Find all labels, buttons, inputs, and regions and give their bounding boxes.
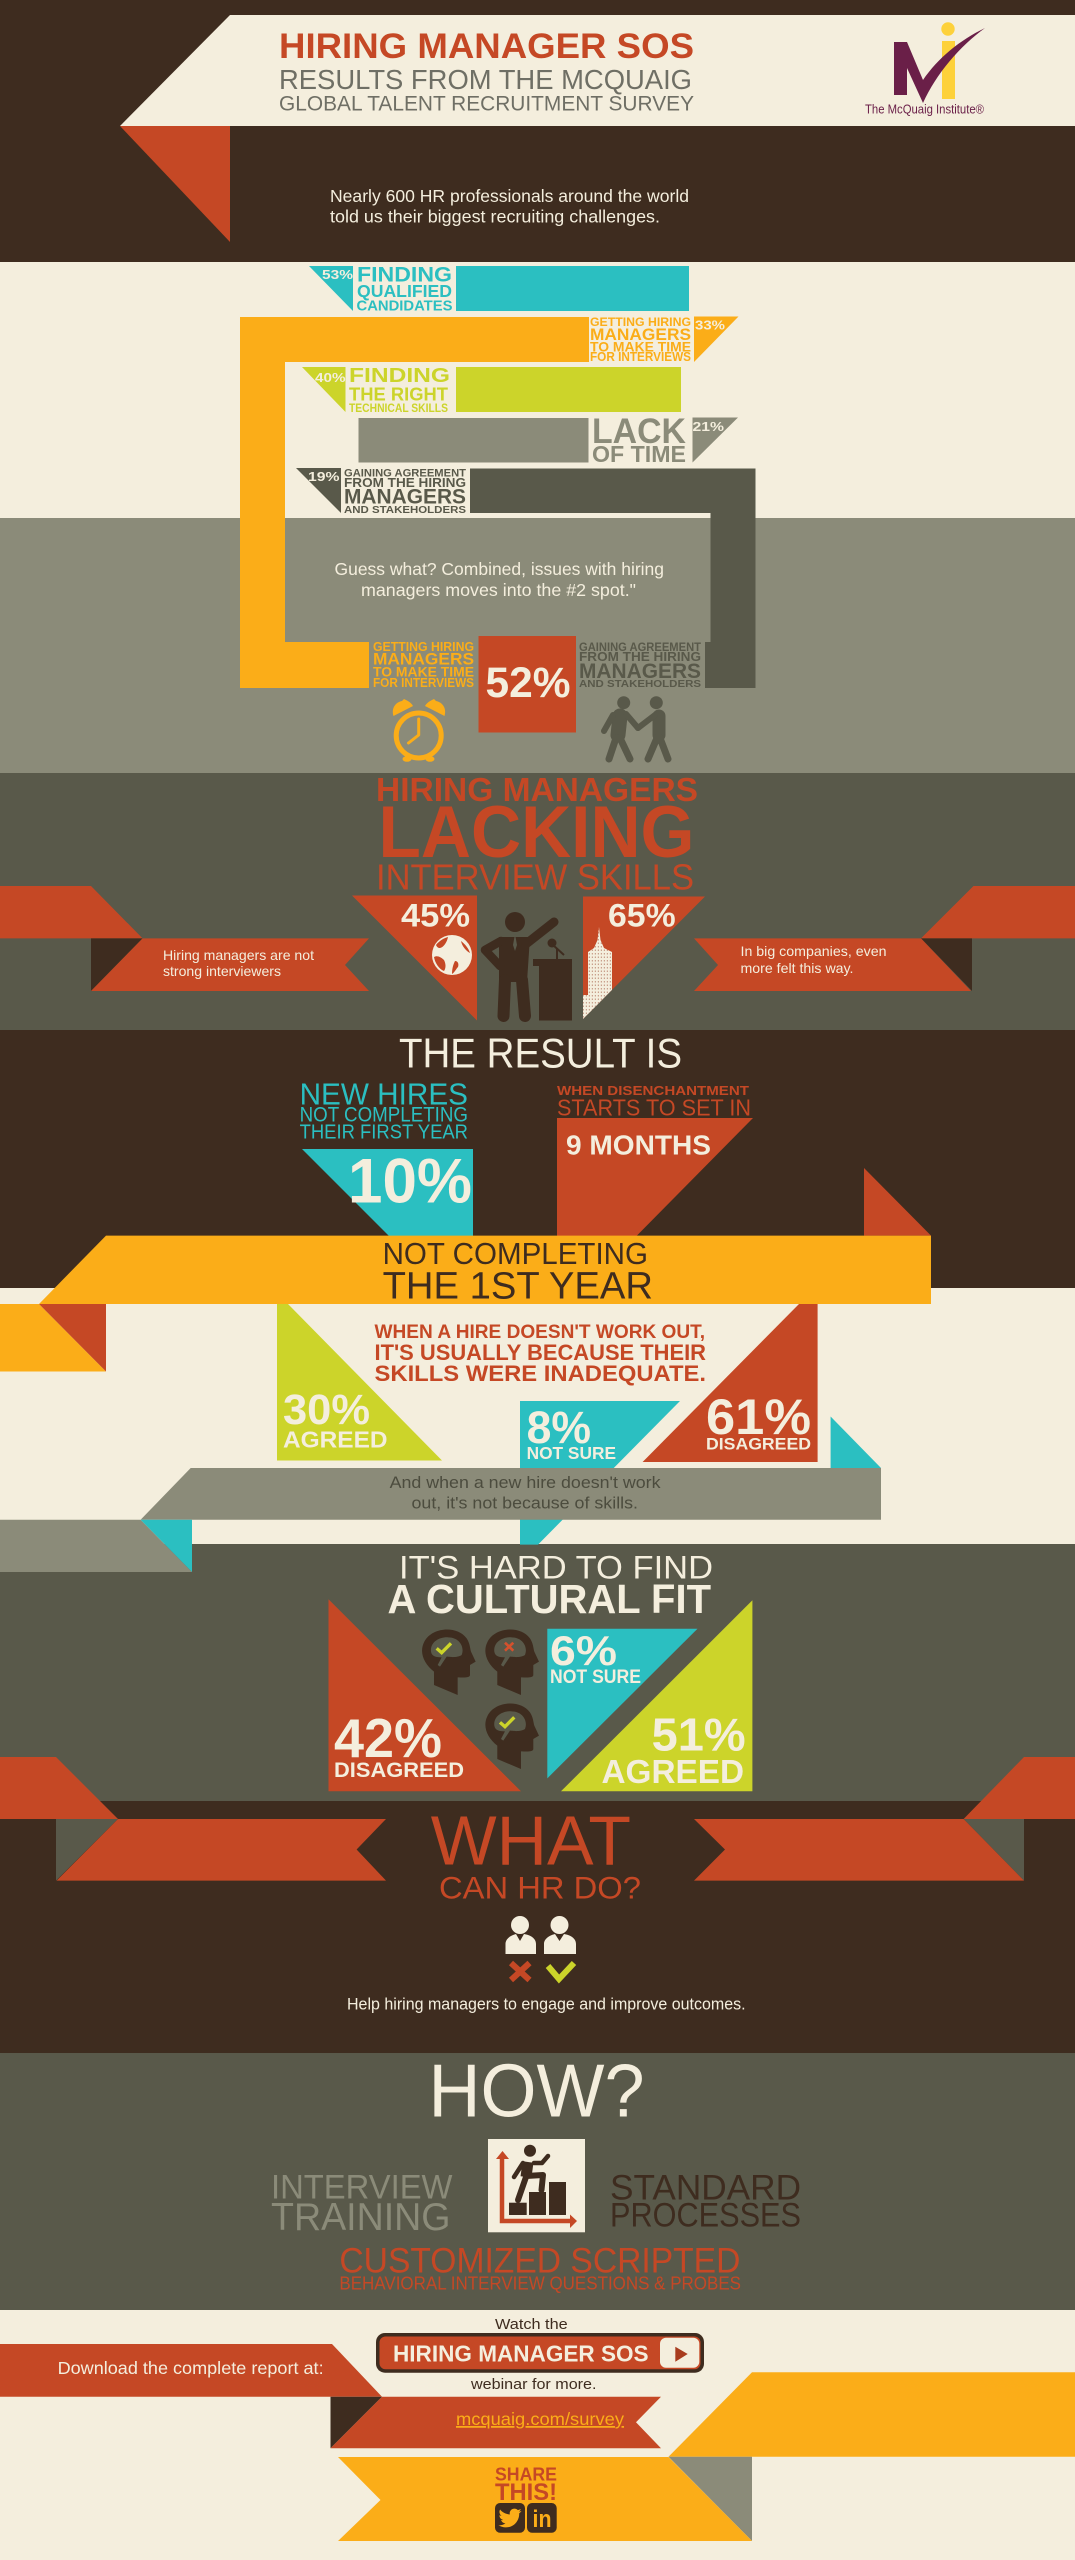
callout: guess what: managers moves into the #2 spot." <box>361 580 636 600</box>
ribbon: what left <box>0 1757 386 1881</box>
heading: hiring managers lacking interview skills: INTERVIEW SKILLS <box>376 856 694 897</box>
stat: 8% not sure: 8% <box>527 1402 591 1453</box>
subtitle line two: GLOBAL TALENT RECRUITMENT SURVEY <box>279 92 694 116</box>
ribbon: share this: SHARE <box>495 2465 557 2485</box>
label: getting hiring managers: FOR INTERVIEWS <box>373 676 474 690</box>
ribbon: right big companies: more felt this way. <box>740 960 854 976</box>
ribbon: not completing the 1st year <box>0 1168 931 1372</box>
text: when disenchantment: WHEN DISENCHANTMENT <box>557 1083 749 1098</box>
stat: 9 months: 9 MONTHS <box>566 1130 711 1160</box>
bar: gaining agreement 19%: 19% <box>308 469 340 484</box>
heading: how: HOW? <box>428 2049 644 2133</box>
stat: 42% disagreed <box>328 1599 521 1791</box>
bar: lack of time 21%: LACK <box>592 412 686 451</box>
label: getting hiring managers: TO MAKE TIME <box>373 663 474 679</box>
heading: when a hire doesn't work out: WHEN A HIRE DOESN'T WORK OUT, <box>374 1322 705 1343</box>
stat: 45% with globe: 45% <box>401 898 470 934</box>
stat: 61% disagreed: DISAGREED <box>706 1434 811 1454</box>
text: new hires not completing: NOT COMPLETING <box>300 1103 468 1126</box>
icon: head with check <box>422 1630 476 1695</box>
ribbon: not because of skills: And when a new hire doesn't work <box>390 1473 661 1492</box>
text: standard processes <box>610 2168 801 2235</box>
text: interview training: TRAINING <box>271 2196 450 2239</box>
button: hiring manager sos webinar: HIRING MANAGER SOS <box>393 2341 649 2367</box>
text: help hiring managers: Help hiring managers to engage and improve outcomes. <box>347 1995 746 2014</box>
stat: 45% with globe <box>352 896 477 1020</box>
logo: McQuaig Institute <box>865 22 985 117</box>
label: getting hiring managers: GETTING HIRING <box>373 640 474 654</box>
text: interview training: INTERVIEW <box>271 2168 452 2206</box>
text: customized scripted: BEHAVIORAL INTERVIEW QUESTIONS & PROBES <box>339 2272 741 2293</box>
icon: speaker at podium <box>485 912 572 1020</box>
stat: 8% not sure <box>520 1401 680 1545</box>
bar: lack of time 21%: 21% <box>692 419 725 434</box>
intro text <box>330 186 689 226</box>
heading: cultural fit: IT'S HARD TO FIND <box>399 1549 713 1585</box>
stat: 30% agreed <box>277 1304 442 1460</box>
icon: twitter <box>495 2503 525 2533</box>
bar: finding qualified candidates 53% <box>309 264 689 314</box>
bar: gaining agreement 19% <box>296 468 756 688</box>
heading: when a hire doesn't work out: SKILLS WERE INADEQUATE. <box>374 1361 706 1386</box>
ribbon: left strong interviewers: Hiring managers are not <box>163 947 314 963</box>
bar: finding the right technical skills 40%: 40% <box>315 370 346 385</box>
ribbon: left strong interviewers: strong interviewers <box>163 963 281 979</box>
text: when disenchantment <box>557 1083 751 1121</box>
icon: head with cross <box>485 1630 539 1695</box>
stat: 6% not sure: 6% <box>550 1627 617 1674</box>
stat: 10% <box>302 1146 473 1236</box>
ribbon: download report: Download the complete report at: <box>58 2358 324 2378</box>
ribbon: not because of skills: out, it's not because of skills. <box>412 1494 638 1512</box>
text: new hires not completing: NEW HIRES <box>300 1076 468 1112</box>
stat: 61% disagreed: 61% <box>706 1389 811 1445</box>
stat: 30% agreed: AGREED <box>283 1427 388 1453</box>
intro text: Nearly 600 HR professionals around the world <box>330 186 689 206</box>
stat: 52%: 52% <box>486 659 570 707</box>
bar: finding the right technical skills 40%: FINDING <box>349 364 450 387</box>
bar: getting hiring managers 33%: 33% <box>695 318 725 332</box>
bar: finding qualified candidates 53%: FINDING <box>357 264 452 286</box>
stat: 10%: 10% <box>348 1146 472 1216</box>
icon: handshake <box>604 696 668 759</box>
heading: hiring managers lacking interview skills <box>376 772 698 897</box>
ribbon: right big companies: In big companies, even <box>740 943 886 959</box>
stat: 51% agreed <box>561 1600 752 1791</box>
text: new hires not completing: THEIR FIRST YEAR <box>300 1121 468 1143</box>
callout: guess what: Guess what? Combined, issues with hiring <box>334 559 664 579</box>
stat: 51% agreed: AGREED <box>602 1753 744 1790</box>
stat: 9 months <box>557 1118 753 1236</box>
icon: linkedin <box>527 2503 557 2533</box>
text: webinar for more: webinar for more. <box>470 2376 596 2393</box>
bar: getting hiring managers 33%: TO MAKE TIME <box>590 338 691 354</box>
stat: 65% with building <box>583 896 705 1020</box>
bar: finding the right technical skills 40%: THE RIGHT <box>349 384 448 404</box>
stat: 51% agreed: 51% <box>652 1708 746 1760</box>
bar: gaining agreement 19%: FROM THE HIRING <box>344 475 466 490</box>
subtitle line one: RESULTS FROM THE MCQUAIG <box>279 64 692 95</box>
text: new hires not completing <box>300 1076 468 1143</box>
bar: gaining agreement 19%: AND STAKEHOLDERS <box>344 504 466 516</box>
bar: gaining agreement 19%: GAINING AGREEMENT <box>344 468 466 480</box>
text: watch the: Watch the <box>495 2316 568 2333</box>
stat: 61% disagreed <box>643 1304 818 1462</box>
heading: the result is: THE RESULT IS <box>399 1029 682 1076</box>
text: interview training <box>271 2168 452 2239</box>
ribbon: download report: mcquaig.com/survey <box>456 2409 624 2429</box>
label: getting hiring managers <box>373 640 474 690</box>
bar: lack of time 21% <box>358 412 738 467</box>
heading: what can hr do: WHAT <box>431 1802 631 1880</box>
text: standard processes: PROCESSES <box>610 2197 801 2235</box>
label: gaining agreement <box>579 640 702 690</box>
bar: getting hiring managers 33%: GETTING HIRING <box>590 315 691 329</box>
bar: finding the right technical skills 40% <box>302 364 681 415</box>
ribbon: share this: THIS! <box>495 2479 557 2506</box>
heading: cultural fit <box>388 1549 713 1622</box>
bar: getting hiring managers 33%: FOR INTERVIEWS <box>590 350 691 364</box>
ribbon: not completing the 1st year: THE 1ST YEAR <box>383 1265 653 1307</box>
bar: finding qualified candidates 53%: QUALIFIED <box>357 281 452 301</box>
icon: people with cross and check <box>506 1916 576 1980</box>
intro text: told us their biggest recruiting challenges. <box>330 206 660 226</box>
icon: linkedin: in <box>532 2506 552 2533</box>
ribbon: right big companies <box>694 886 1075 991</box>
logo: McQuaig Institute: The McQuaig Institute® <box>865 103 985 117</box>
label: gaining agreement: AND STAKEHOLDERS <box>579 678 701 690</box>
heading: when a hire doesn't work out: IT'S USUALLY BECAUSE THEIR <box>374 1340 706 1365</box>
text: standard processes: STANDARD <box>610 2168 801 2207</box>
heading: hiring managers lacking interview skills: LACKING <box>378 792 694 873</box>
label: getting hiring managers: MANAGERS <box>373 650 474 669</box>
label: gaining agreement: MANAGERS <box>579 660 701 683</box>
heading: what can hr do: CAN HR DO? <box>439 1869 641 1905</box>
bar: finding qualified candidates 53%: 53% <box>322 267 354 282</box>
button: hiring manager sos webinar <box>376 2333 704 2373</box>
ribbon: left strong interviewers <box>0 886 369 991</box>
ribbon: not completing the 1st year: NOT COMPLETING <box>383 1237 648 1271</box>
label: gaining agreement: FROM THE HIRING <box>579 650 701 664</box>
panel: header banner <box>120 15 1075 242</box>
stat: 52% <box>478 636 576 732</box>
text: when disenchantment: STARTS TO SET IN <box>557 1095 751 1121</box>
stat: 8% not sure: NOT SURE <box>527 1443 616 1463</box>
bar: gaining agreement 19%: MANAGERS <box>344 486 466 508</box>
stat: 6% not sure <box>547 1627 698 1778</box>
heading: when a hire doesn't work out <box>374 1322 706 1386</box>
bar: finding the right technical skills 40%: TECHNICAL SKILLS <box>349 403 448 415</box>
stat: 42% disagreed: DISAGREED <box>334 1759 464 1782</box>
bar: getting hiring managers 33% <box>240 315 738 688</box>
stat: 65% with building: 65% <box>608 898 676 934</box>
icon: head with check lower <box>485 1704 539 1769</box>
icon: climbing steps <box>488 2139 585 2232</box>
stat: 6% not sure: NOT SURE <box>550 1667 641 1688</box>
bar: finding qualified candidates 53%: CANDIDATES <box>356 298 452 314</box>
ribbon: share this <box>338 2372 1075 2541</box>
heading: cultural fit: A CULTURAL FIT <box>388 1576 711 1622</box>
ribbon: download report <box>0 2344 661 2448</box>
text: customized scripted: CUSTOMIZED SCRIPTED <box>339 2242 740 2281</box>
ribbon: not because of skills <box>0 1416 881 1572</box>
callout: guess what <box>334 559 664 600</box>
stat: 42% disagreed: 42% <box>334 1707 442 1769</box>
bar: getting hiring managers 33%: MANAGERS <box>590 325 691 344</box>
label: gaining agreement: GAINING AGREEMENT <box>579 640 702 654</box>
heading: hiring managers lacking interview skills: HIRING MANAGERS <box>376 772 698 809</box>
bar: lack of time 21%: OF TIME <box>592 441 686 467</box>
stat: 30% agreed: 30% <box>283 1386 370 1434</box>
icon: alarm clock <box>393 699 445 762</box>
ribbon: what right <box>694 1757 1075 1881</box>
title: HIRING MANAGER SOS <box>279 27 694 66</box>
